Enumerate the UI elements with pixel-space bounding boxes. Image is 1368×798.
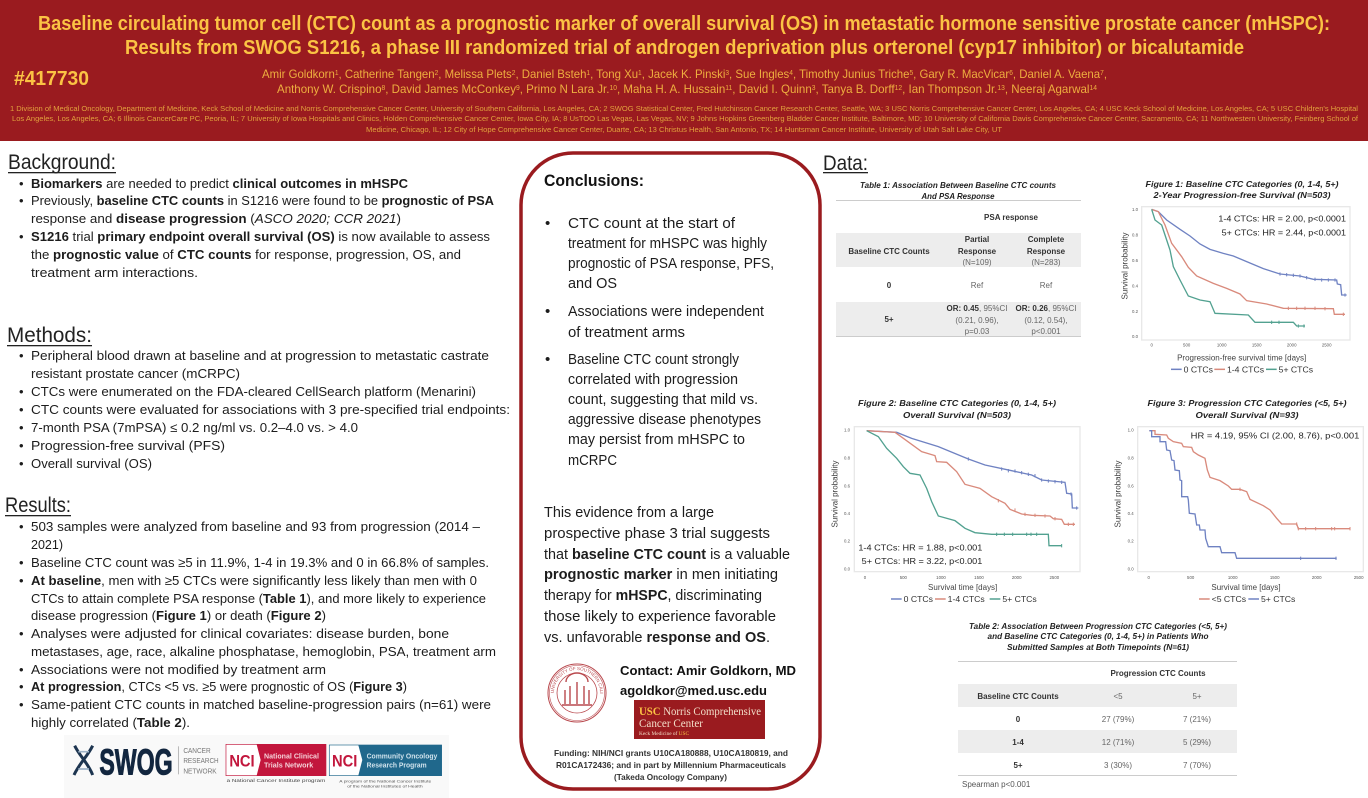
methods bullets: Overall survival (OS) bbox=[31, 456, 152, 471]
figure 3 plot: 2000 bbox=[1312, 575, 1322, 580]
table 2 cells: 7 (70%) bbox=[1183, 761, 1211, 770]
background bullets: treatment arm interactions. bbox=[31, 265, 198, 280]
figure 1 caption: Figure 1: Baseline CTC Categories (0, 1-4, 5+) bbox=[1146, 179, 1339, 189]
figure 3 caption: Overall Survival (N=93) bbox=[1196, 410, 1299, 420]
figure 3: progression OS Kaplan-Meier chart bbox=[1114, 398, 1364, 604]
conclusion bullets bbox=[545, 215, 774, 469]
figure 2 plot: 1.0 bbox=[844, 428, 851, 433]
cancer research network text bbox=[178, 746, 219, 775]
figure 1 plot: 5+ CTCs bbox=[1279, 364, 1314, 374]
figure 3 plot: 1500 bbox=[1270, 575, 1280, 580]
table 2 cells: 3 (30%) bbox=[1104, 761, 1132, 770]
table 1 cells: Ref bbox=[971, 281, 984, 290]
table 1 cells: Complete bbox=[1028, 235, 1065, 244]
figure 2 plot bbox=[831, 427, 1080, 604]
table 1 cells: Ref bbox=[1040, 281, 1053, 290]
table 2 cells: <5 bbox=[1113, 692, 1123, 701]
heading: methods: Methods: bbox=[7, 324, 92, 347]
results bullets: At progression, CTCs <5 vs. ≥5 were prognostic of OS (Figure 3) bbox=[31, 679, 407, 694]
background bullets: the prognostic value of CTC counts for response, progression, OS, and bbox=[31, 247, 461, 262]
results bullets: Analyses were adjusted for clinical covariates: disease burden, bone bbox=[31, 626, 449, 641]
conclusion bullets: prognostic of PSA response, PFS, bbox=[568, 255, 774, 272]
table 1 cells: Partial bbox=[965, 235, 989, 244]
conclusion summary paragraph: prospective phase 3 trial suggests bbox=[544, 525, 770, 542]
figure 2 plot: 0.2 bbox=[844, 539, 851, 544]
results bullets: • bbox=[19, 555, 24, 570]
results bullets: • bbox=[19, 519, 24, 534]
conclusion bullets: may persist from mHSPC to bbox=[568, 431, 745, 448]
methods bullets: CTC counts were evaluated for associations with 3 pre-specified trial endpoints: bbox=[31, 402, 510, 417]
figure 1 plot: 0.2 bbox=[1132, 309, 1139, 314]
NCI National Clinical Trials Network logo: a National Cancer Institute program bbox=[227, 778, 325, 784]
NCI Community Oncology Research Program logo: A program of the National Cancer Institute bbox=[339, 778, 432, 783]
icon: USC seal bbox=[548, 664, 606, 722]
methods bullets: • bbox=[19, 456, 24, 471]
figure 2 plot: 1-4 CTCs: HR = 1.88, p<0.001 bbox=[858, 542, 983, 552]
figure 3 plot: HR = 4.19, 95% CI (2.00, 8.76), p<0.001 bbox=[1191, 431, 1360, 441]
affiliations: 1 Division of Medical Oncology, Department of Medicine, Keck School of Medicine and Norris Comprehensive Cancer Center, University of Southern California, Los Angeles, CA; 2 SWOG Statistical Center, Fred Hutchinson Cancer Research Center, Seattle, WA; 3 USC Norris Comprehensive Cancer Center, Los Angeles, CA; 4 USC Keck School of Medicine, Los Angeles, CA; 5 USC Children's Hospital bbox=[10, 106, 1358, 113]
table 1 cells: p=0.03 bbox=[965, 327, 990, 336]
table 2 cells: Progression CTC Counts bbox=[1110, 669, 1206, 678]
figure 1 plot: 2000 bbox=[1287, 343, 1297, 348]
results bullets: • bbox=[19, 679, 24, 694]
figure 2 plot: 1-4 CTCs bbox=[948, 594, 985, 604]
figure 3 plot: 0 bbox=[1147, 575, 1150, 580]
figure 2 plot: 0.0 bbox=[844, 566, 851, 571]
figure 1 plot: 1500 bbox=[1252, 343, 1262, 348]
NCI Community Oncology Research Program logo: of the National Institutes of Health bbox=[347, 784, 423, 789]
NCI National Clinical Trials Network logo: Trials Network bbox=[264, 763, 313, 770]
table 1 cells: p<0.001 bbox=[1031, 327, 1061, 336]
figure 1 plot: 0.6 bbox=[1132, 258, 1139, 263]
cancer research network text: NETWORK bbox=[183, 768, 217, 775]
figure 3 plot: 1.0 bbox=[1128, 428, 1134, 433]
results bullets: • bbox=[19, 697, 24, 712]
conclusion bullets: aggressive disease phenotypes bbox=[568, 411, 761, 428]
table 2 cells bbox=[977, 669, 1211, 770]
table 1 caption: Table 1: Association Between Baseline CTC counts bbox=[860, 180, 1056, 190]
background bullets: • bbox=[19, 229, 24, 244]
title bbox=[38, 13, 1330, 59]
authors bbox=[262, 67, 1107, 96]
conclusion bullets: mCRPC bbox=[568, 452, 617, 469]
figure 1 plot: 0 CTCs bbox=[1184, 364, 1214, 374]
conclusion summary paragraph: that baseline CTC count is a valuable bbox=[544, 546, 790, 563]
conclusion bullets: CTC count at the start of bbox=[568, 215, 736, 232]
SWOG logo text: SWOG bbox=[99, 741, 173, 782]
results bullets: metastases, age, race, alkaline phosphatase, hemoglobin, PSA, treatment arm bbox=[31, 644, 496, 659]
spearman note: Spearman p<0.001 bbox=[962, 780, 1031, 789]
methods bullets: • bbox=[19, 348, 24, 363]
table 2 cells: 5+ bbox=[1192, 692, 1202, 701]
table 1 cells: (N=283) bbox=[1031, 258, 1061, 267]
conclusion bullets: count, suggesting that mild vs. bbox=[568, 391, 758, 408]
table 2 cells: 12 (71%) bbox=[1102, 738, 1135, 747]
table 2 cells: 1-4 bbox=[1012, 738, 1024, 747]
background bullets: Biomarkers are needed to predict clinical outcomes in mHSPC bbox=[31, 176, 409, 191]
panel: conclusions bbox=[519, 151, 822, 791]
table 1 cells: (0.21, 0.96), bbox=[955, 316, 999, 325]
conclusion summary paragraph: This evidence from a large bbox=[544, 504, 714, 521]
USC Norris logo bbox=[634, 700, 765, 739]
header banner bbox=[0, 0, 1368, 141]
background bullets: response and disease progression (ASCO 2020; CCR 2021 ) bbox=[31, 211, 401, 226]
conclusion summary paragraph bbox=[544, 504, 790, 646]
background bullets: • bbox=[19, 176, 24, 191]
table 2 caption: Submitted Samples at Both Timepoints (N=61) bbox=[1007, 642, 1189, 652]
methods bullets: • bbox=[19, 420, 24, 435]
methods bullets: • bbox=[19, 402, 24, 417]
figure 1 caption: 2-Year Progression-free Survival (N=503) bbox=[1152, 190, 1331, 200]
figure 1 plot: 0.4 bbox=[1132, 283, 1139, 288]
figure 3 plot: 0.6 bbox=[1128, 483, 1134, 488]
background bullets: S1216 trial primary endpoint overall survival (OS) is now available to assess bbox=[31, 229, 490, 244]
NCI Community Oncology Research Program logo: Community Oncology bbox=[367, 753, 437, 760]
figure 1 plot: 2500 bbox=[1322, 343, 1332, 348]
figure 1 plot: Progression-free survival time [days] bbox=[1177, 353, 1306, 362]
methods bullets: Peripheral blood drawn at baseline and at progression to metastatic castrate bbox=[31, 348, 489, 363]
figure 2 plot: 1500 bbox=[974, 575, 984, 580]
figure 1 plot: 1.0 bbox=[1132, 207, 1139, 212]
panel: results bbox=[5, 494, 496, 730]
authors: Amir Goldkorn1, Catherine Tangen2, Melissa Plets2, Daniel Bsteh1, Tong Xu1, Jacek K. Pinski3, Sue Ingles4, Timothy Junius Triche5, Gary R. MacVicar6, Daniel A. Vaena7, bbox=[262, 67, 1107, 81]
figure 3 plot: 0.4 bbox=[1128, 511, 1134, 516]
results bullets: disease progression (Figure 1) or death (Figure 2) bbox=[31, 608, 326, 623]
figure 1 plot: 0 bbox=[1150, 343, 1153, 348]
heading: background: Background: bbox=[8, 151, 116, 174]
figure 2 plot: 2000 bbox=[1012, 575, 1022, 580]
figure 1 caption bbox=[1146, 179, 1339, 200]
authors: Anthony W. Crispino8, David James McConkey9, Primo N Lara Jr.10, Maha H. A. Hussain11, David I. Quinn3, Tanya B. Dorff12, Ian Thompson Jr.13, Neeraj Agarwal14 bbox=[277, 82, 1097, 96]
figure 1 plot: 5+ CTCs: HR = 2.44, p<0.0001 bbox=[1222, 227, 1346, 237]
results bullets: Same-patient CTC counts in matched baseline-progression pairs (n=61) were bbox=[31, 697, 491, 712]
figure 3 plot: 2500 bbox=[1354, 575, 1364, 580]
table 1 caption: And PSA Response bbox=[921, 191, 995, 201]
methods bullets: 7-month PSA (7mPSA) ≤ 0.2 ng/ml vs. 0.2–4.0 vs. > 4.0 bbox=[31, 420, 358, 435]
table 1 cells: OR: 0.26, 95%CI bbox=[1016, 304, 1076, 313]
figure 1 plot: 1-4 CTCs: HR = 2.00, p<0.0001 bbox=[1218, 213, 1346, 223]
figure 3 plot: 0.0 bbox=[1128, 566, 1134, 571]
figure 1 plot: 0.8 bbox=[1132, 233, 1139, 238]
table 1 cells: Baseline CTC Counts bbox=[848, 247, 930, 256]
conclusion bullets: of treatment arms bbox=[568, 324, 685, 341]
conclusion summary paragraph: those likely to experience favorable bbox=[544, 608, 776, 625]
NCI National Clinical Trials Network logo bbox=[226, 744, 326, 784]
figure 3 plot: 1000 bbox=[1228, 575, 1238, 580]
figure 3 plot: 0.8 bbox=[1128, 456, 1134, 461]
results bullets: • bbox=[19, 626, 24, 641]
results bullets: 503 samples were analyzed from baseline and 93 from progression (2014 – bbox=[31, 519, 481, 534]
figure 1 plot: 1-4 CTCs bbox=[1227, 364, 1265, 374]
contact: Contact: Amir Goldkorn, MD bbox=[620, 663, 796, 678]
table 1 bbox=[836, 180, 1081, 337]
figure 2 plot: 5+ CTCs: HR = 3.22, p<0.001 bbox=[862, 556, 983, 566]
USC Norris logo: Cancer Center bbox=[639, 716, 703, 730]
figure 3 plot: <5 CTCs bbox=[1212, 594, 1247, 604]
figure 1 plot: 1000 bbox=[1217, 343, 1227, 348]
table 1 cells: 5+ bbox=[884, 315, 894, 324]
figure 3 plot bbox=[1114, 427, 1364, 604]
table 1 cells: Response bbox=[958, 247, 997, 256]
NCI National Clinical Trials Network logo: NCI bbox=[229, 751, 255, 770]
methods bullets: resistant prostate cancer (mCRPC) bbox=[31, 366, 240, 381]
figure 2 plot: 0.4 bbox=[844, 511, 851, 516]
affiliations bbox=[10, 106, 1358, 134]
NCI Community Oncology Research Program logo: NCI bbox=[332, 751, 357, 770]
results bullets: At baseline, men with ≥5 CTCs were significantly less likely than men with 0 bbox=[31, 573, 477, 588]
figure 1: PFS Kaplan-Meier chart bbox=[1120, 179, 1350, 374]
methods bullets bbox=[19, 348, 510, 471]
affiliations: Medicine, Chicago, IL; 12 City of Hope Comprehensive Cancer Center, Duarte, CA; 13 Christus Health, San Antonio, TX; 14 Huntsman Cancer Institute, University of Utah Salt Lake City, UT bbox=[366, 127, 1003, 134]
figure 2 caption: Overall Survival (N=503) bbox=[903, 410, 1011, 420]
conclusion bullets: • bbox=[545, 303, 550, 320]
figure 2 caption: Figure 2: Baseline CTC Categories (0, 1-4, 5+) bbox=[858, 398, 1056, 408]
figure 2 plot: 2500 bbox=[1050, 575, 1060, 580]
conclusion bullets: • bbox=[545, 215, 550, 232]
background bullets bbox=[19, 176, 495, 280]
figure 2 caption bbox=[858, 398, 1056, 420]
table 1 cells bbox=[848, 213, 1076, 336]
table 2 caption: Table 2: Association Between Progression CTC Categories (<5, 5+) bbox=[969, 621, 1227, 631]
table 2 cells: Baseline CTC Counts bbox=[977, 692, 1059, 701]
funding: Funding: NIH/NCI grants U10CA180888, U10CA180819, and bbox=[554, 748, 788, 758]
figure 2: OS Kaplan-Meier chart bbox=[831, 398, 1080, 604]
figure 2 plot: Survival probability bbox=[831, 460, 840, 528]
table 1 cells: OR: 0.45, 95%CI bbox=[947, 304, 1007, 313]
figure 3 plot: Survival probability bbox=[1114, 460, 1123, 528]
figure 2 plot: 0 CTCs bbox=[904, 594, 934, 604]
USC Norris logo: USC Norris Comprehensive bbox=[639, 704, 761, 718]
table 1 cells: PSA response bbox=[984, 213, 1039, 222]
results bullets: 2021) bbox=[31, 537, 63, 552]
figure 2 plot: 0.6 bbox=[844, 483, 851, 488]
background bullets: • bbox=[19, 193, 24, 208]
NCI Community Oncology Research Program logo bbox=[329, 745, 442, 789]
icon: SWOG DNA helix bbox=[74, 746, 93, 775]
table 2 cells: 5 (29%) bbox=[1183, 738, 1211, 747]
table 2 cells: 0 bbox=[1016, 715, 1021, 724]
conclusion bullets: treatment for mHSPC was highly bbox=[568, 235, 767, 252]
NCI Community Oncology Research Program logo: Research Program bbox=[367, 763, 427, 770]
figure 1 plot bbox=[1120, 207, 1350, 374]
conclusion bullets: and OS bbox=[568, 275, 617, 292]
figure 3 caption bbox=[1148, 398, 1347, 420]
methods bullets: • bbox=[19, 438, 24, 453]
results bullets bbox=[19, 519, 496, 730]
funding: R01CA172436; and in part by Millennium Pharmaceuticals bbox=[556, 760, 786, 770]
figure 3 plot: 0.2 bbox=[1128, 539, 1134, 544]
title: Results from SWOG S1216, a phase III randomized trial of androgen deprivation plus orteronel (cyp17 inhibitor) or bicalutamide bbox=[125, 37, 1244, 59]
figure 3 plot: Survival time [days] bbox=[1211, 583, 1281, 592]
conclusion summary paragraph: therapy for mHSPC, discriminating bbox=[544, 587, 762, 604]
conclusion bullets: correlated with progression bbox=[568, 371, 738, 388]
table 1 cells: (0.12, 0.54), bbox=[1024, 316, 1068, 325]
figure 2 plot: 0 bbox=[864, 575, 867, 580]
heading: results: Results: bbox=[5, 494, 71, 517]
affiliations: Los Angeles, Los Angeles, CA; 6 Illinois CancerCare PC, Peoria, IL; 7 University of Iowa Hospitals and Clinics, Holden Comprehensive Cancer Center, Iowa City, IA; 8 UsTOO Las Vegas, Las Vegas, NV; 9 Johns Hopkins Greenberg Bladder Cancer Institute, Baltimore, MD; 10 University of California Davis Comprehensive Cancer Center, Sacramento, CA; 11 Northwestern University, Feinberg School of bbox=[12, 116, 1358, 123]
contact bbox=[620, 663, 796, 698]
funding: (Takeda Oncology Company) bbox=[614, 772, 727, 782]
figure 2 plot: 1000 bbox=[936, 575, 946, 580]
conclusion bullets: Baseline CTC count strongly bbox=[568, 351, 739, 368]
panel: methods bbox=[7, 324, 510, 471]
figure 1 plot: 0.0 bbox=[1132, 334, 1139, 339]
conclusion summary paragraph: vs. unfavorable response and OS. bbox=[544, 629, 770, 646]
sponsor logos bbox=[64, 735, 449, 798]
results bullets: Baseline CTC count was ≥5 in 11.9%, 1-4 in 19.3% and 0 in 66.8% of samples. bbox=[31, 555, 489, 570]
table 2 cells: 5+ bbox=[1013, 761, 1023, 770]
figure 1 plot: 500 bbox=[1183, 343, 1191, 348]
table 2 caption bbox=[969, 621, 1227, 652]
results bullets: highly correlated (Table 2). bbox=[31, 715, 190, 730]
figure 2 plot: 500 bbox=[900, 575, 908, 580]
conclusion bullets: • bbox=[545, 351, 550, 368]
methods bullets: • bbox=[19, 384, 24, 399]
USC Norris logo: Keck Medicine of USC bbox=[639, 732, 690, 737]
background bullets: Previously, baseline CTC counts in S1216 were found to be prognostic of PSA bbox=[31, 193, 495, 208]
panel: background bbox=[8, 151, 495, 280]
conclusion bullets: Associations were independent bbox=[568, 303, 765, 320]
cancer research network text: CANCER bbox=[183, 748, 211, 755]
table 1 caption bbox=[860, 180, 1056, 201]
table 2 cells: 27 (79%) bbox=[1102, 715, 1135, 724]
NCI National Clinical Trials Network logo: National Clinical bbox=[264, 753, 319, 760]
table 1 cells: Response bbox=[1027, 247, 1066, 256]
abstract number: #417730 bbox=[14, 68, 89, 90]
table 2 bbox=[958, 621, 1237, 789]
heading: conclusions: Conclusions: bbox=[544, 171, 644, 190]
contact: agoldkor@med.usc.edu bbox=[620, 683, 767, 698]
figure 2 plot: Survival time [days] bbox=[928, 583, 997, 592]
figure 2 plot: 5+ CTCs bbox=[1002, 594, 1037, 604]
figure 3 caption: Figure 3: Progression CTC Categories (<5, 5+) bbox=[1148, 398, 1347, 408]
funding bbox=[554, 748, 788, 782]
figure 3 plot: 500 bbox=[1187, 575, 1195, 580]
table 1 cells: (N=109) bbox=[962, 258, 992, 267]
figure 3 plot: 5+ CTCs bbox=[1261, 594, 1296, 604]
results bullets: Associations were not modified by treatment arm bbox=[31, 662, 326, 677]
icon: USC seal: UNIVERSITY OF SOUTHERN CALIFORNIA bbox=[550, 666, 604, 694]
methods bullets: Progression-free survival (PFS) bbox=[31, 438, 225, 453]
heading: data: Data: bbox=[823, 152, 868, 175]
figure 2 plot: 0.8 bbox=[844, 456, 851, 461]
figure 1 plot: Survival probability bbox=[1120, 232, 1129, 300]
cancer research network text: RESEARCH bbox=[183, 758, 219, 765]
conclusion summary paragraph: prognostic marker in men initiating bbox=[544, 566, 778, 583]
methods bullets: CTCs were enumerated on the FDA-cleared CellSearch platform (Menarini) bbox=[31, 384, 476, 399]
table 2 cells: 7 (21%) bbox=[1183, 715, 1211, 724]
results bullets: CTCs to attain complete PSA response (Table 1), and more likely to experience bbox=[31, 591, 486, 606]
table 1 cells: 0 bbox=[887, 281, 892, 290]
results bullets: • bbox=[19, 573, 24, 588]
results bullets: • bbox=[19, 662, 24, 677]
table 2 caption: and Baseline CTC Categories (0, 1-4, 5+) in Patients Who bbox=[988, 631, 1208, 641]
